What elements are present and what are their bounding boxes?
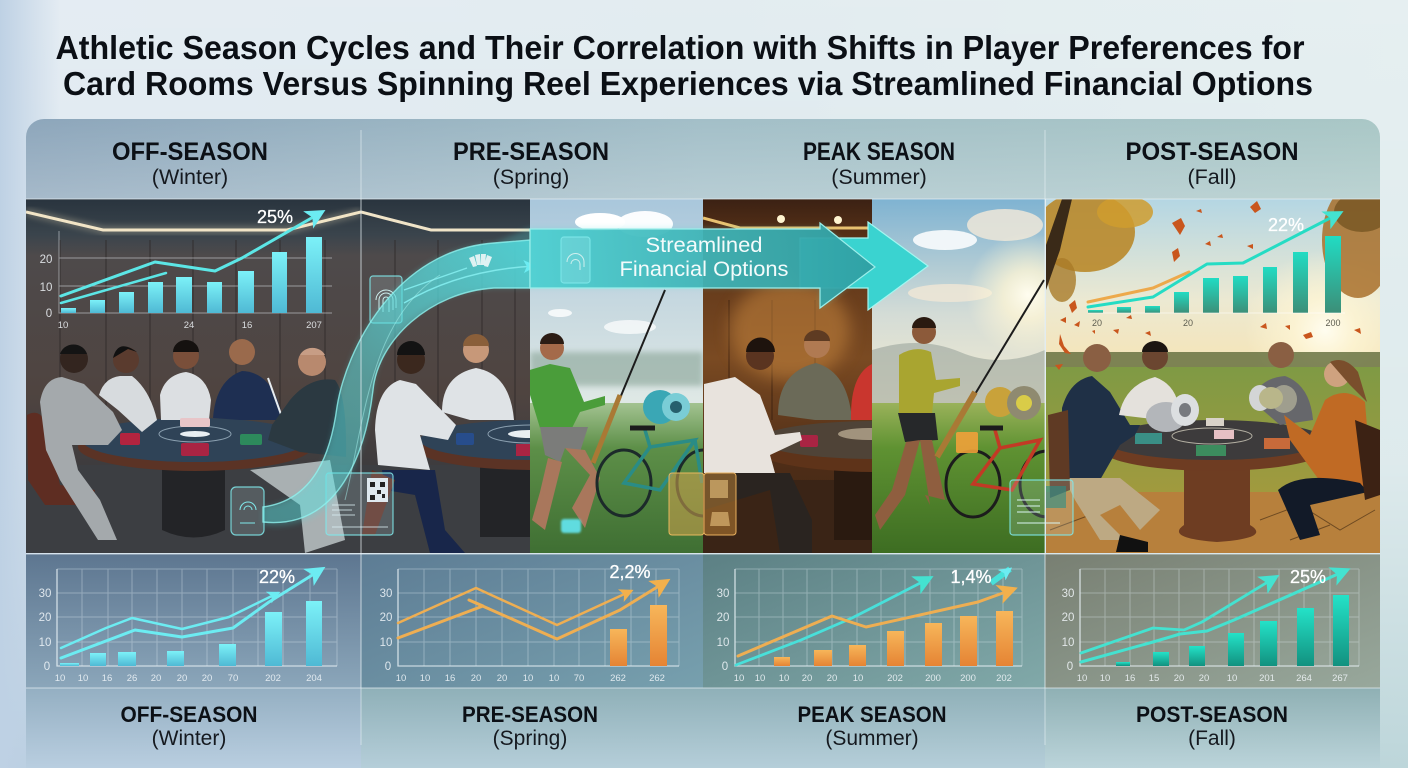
chart: off-season: 22%	[259, 567, 295, 587]
chart: post-season: 267	[1332, 673, 1348, 684]
chart: winter room bars: 10	[40, 282, 52, 294]
streamlined band	[530, 222, 928, 310]
chairs and table	[27, 413, 312, 538]
icon: red bicycle	[944, 426, 1045, 518]
label: pre-season: PRE-SEASON	[462, 702, 598, 727]
chart: pre-season: 20	[497, 673, 507, 684]
arrow: streamlined financial options swoosh	[263, 222, 928, 526]
label: off-season	[120, 702, 258, 750]
person: red top	[851, 364, 872, 420]
card table	[770, 421, 872, 540]
chart: peak season: 1,4%	[950, 567, 992, 587]
chart: pre-season: 262	[610, 673, 626, 684]
chart: pre-season: 10	[380, 637, 392, 649]
icon: orange card	[956, 432, 978, 453]
icon: fingerprint card on band	[561, 237, 590, 283]
chart: peak season: 20	[802, 673, 812, 684]
chart: post-season: 264	[1296, 673, 1312, 684]
chart: peak season: 10	[853, 673, 863, 684]
chart: post-season	[1045, 554, 1380, 688]
panel: footer season labels	[26, 688, 1380, 768]
chart: peak season: 10	[755, 673, 765, 684]
icon: teal ledger card	[1010, 480, 1073, 535]
heading: off-season: OFF-SEASON	[112, 138, 268, 166]
icon: QR card	[326, 473, 393, 535]
person: white tee	[1119, 341, 1180, 420]
person: green shirt runner	[523, 333, 605, 530]
label: off-season: OFF-SEASON	[120, 702, 258, 727]
heading: off-season: (Winter)	[152, 165, 228, 189]
card table	[421, 420, 530, 537]
heading: pre-season: PRE-SEASON	[453, 138, 609, 166]
financial glass cards	[231, 276, 1073, 535]
panel: season header band	[26, 119, 1380, 199]
chart: pre-season: 16	[445, 673, 455, 684]
poker chips	[120, 418, 262, 456]
person: white jacket	[99, 346, 157, 432]
chart: pre-season: 0	[385, 661, 391, 673]
chart: post-season: 10	[1077, 673, 1087, 684]
chart: post-season: 20	[1062, 612, 1074, 624]
chart: pre-season: 70	[574, 673, 584, 684]
icon: phone card	[231, 487, 264, 535]
foliage trees	[1046, 199, 1380, 302]
falling leaves	[1055, 201, 1361, 370]
chart: post-season: 20	[1174, 673, 1184, 684]
label: peak season: PEAK SEASON	[798, 702, 946, 727]
heading: post-season: POST-SEASON	[1126, 138, 1298, 166]
chart: winter room bars: 16	[242, 320, 252, 331]
label: peak season	[798, 702, 946, 750]
chart: peak season: 10	[734, 673, 744, 684]
chart: off-season: 10	[39, 637, 51, 649]
chart: post-season: 20	[1199, 673, 1209, 684]
chart: autumn rising bars: 20	[1183, 318, 1193, 328]
chart: winter room bars: 10	[58, 320, 68, 331]
heading: post-season	[1126, 138, 1298, 189]
person: white jacket centre	[160, 340, 211, 420]
heading: pre-season: (Spring)	[493, 165, 569, 189]
title: Card Rooms Versus Spinning Reel Experiences via Streamlined Financial Options	[63, 66, 1313, 103]
chart: pre-season: 10	[549, 673, 559, 684]
chart: off-season: 16	[102, 673, 112, 684]
title	[56, 30, 1313, 103]
chart: off-season: 26	[127, 673, 137, 684]
chart: peak season: 30	[717, 588, 729, 600]
chart: autumn rising bars: 22%	[1268, 215, 1304, 235]
heading: peak season: PEAK SEASON	[803, 138, 955, 166]
chart: winter room bars	[40, 207, 332, 331]
label: streamlined financial options: Financial Options	[620, 258, 788, 281]
label: peak season: (Summer)	[825, 727, 919, 750]
chart: off-season: 0	[44, 661, 50, 673]
panel: spring card room scene	[361, 199, 530, 553]
person: navy sweater	[1048, 344, 1160, 552]
chart: autumn rising bars: 200	[1325, 318, 1341, 328]
icon: teal bicycle	[596, 426, 703, 518]
person: white jacket right	[442, 334, 514, 420]
chart: peak season: 10	[717, 637, 729, 649]
panel: summer outdoor scene	[872, 199, 1045, 553]
panel dividers	[26, 199, 1380, 688]
chart: peak season: 20	[827, 673, 837, 684]
chart: post-season: 25%	[1290, 567, 1326, 587]
chart: off-season: 20	[177, 673, 187, 684]
chart: peak season: 202	[887, 673, 903, 684]
panel: autumn outdoor card scene	[1046, 199, 1380, 553]
heading: post-season: (Fall)	[1188, 165, 1236, 189]
chart: winter room bars: 207	[306, 320, 322, 331]
chart: peak season: 0	[722, 661, 728, 673]
person: yellow vest runner	[875, 317, 960, 530]
person: white jacket left	[362, 341, 465, 553]
chart: pre-season: 2,2%	[609, 562, 651, 582]
panel: summer card room scene	[703, 199, 872, 553]
chart: post-season: 30	[1062, 588, 1074, 600]
chart: off-season: 20	[39, 612, 51, 624]
icon: fishing rod and gold reel	[937, 280, 1044, 457]
label: pre-season: (Spring)	[493, 727, 567, 750]
chart: off-season: 20	[151, 673, 161, 684]
chart: winter room bars: 20	[40, 254, 52, 266]
chart: winter room bars: 24	[184, 320, 194, 331]
icon: spring gold card	[669, 473, 704, 535]
chart: pre-season: 20	[380, 612, 392, 624]
icon: fingerprint card	[370, 276, 402, 323]
label: post-season: (Fall)	[1188, 727, 1236, 750]
chart: off-season: 202	[265, 673, 281, 684]
icon: summer gold card	[704, 473, 736, 535]
icon: silver spinning reels	[1146, 385, 1297, 432]
chart: off-season: 204	[306, 673, 322, 684]
person: navy track jacket	[213, 339, 283, 420]
label: streamlined financial options	[620, 234, 788, 281]
chart: off-season	[26, 554, 361, 688]
chart: peak season: 202	[996, 673, 1012, 684]
chart: post-season: 201	[1259, 673, 1275, 684]
icon: fan of cards	[469, 254, 492, 267]
chart: off-season: 70	[228, 673, 238, 684]
heading: peak season: (Summer)	[831, 165, 927, 189]
chart: pre-season	[361, 554, 703, 688]
chart: peak season	[703, 554, 1045, 688]
chart: pre-season: 10	[396, 673, 406, 684]
person: grey hoodie	[40, 344, 122, 540]
chart: post-season: 10	[1100, 673, 1110, 684]
chart: off-season: 20	[202, 673, 212, 684]
panel: spring outdoor scene	[530, 199, 703, 553]
chart: post-season: 0	[1067, 661, 1073, 673]
label: pre-season	[462, 702, 598, 750]
chart: winter room bars: 25%	[257, 207, 293, 227]
label: streamlined financial options: Streamlined	[646, 234, 762, 257]
chart: autumn rising bars: 20	[1092, 318, 1102, 328]
label: post-season	[1136, 702, 1288, 750]
chart: off-season: 10	[78, 673, 88, 684]
panel: winter card room scene	[26, 199, 361, 553]
chart: pre-season: 20	[471, 673, 481, 684]
person: grey shirt	[1261, 342, 1313, 425]
chart: post-season: 15	[1149, 673, 1159, 684]
icon: fishing rod and reel	[593, 290, 690, 463]
person: olive sweater	[778, 330, 852, 420]
chart: pre-season: 10	[420, 673, 430, 684]
chart: off-season: 30	[39, 588, 51, 600]
chart: pre-season: 10	[523, 673, 533, 684]
card table	[1112, 418, 1312, 542]
chart: post-season: 16	[1125, 673, 1135, 684]
chart: pre-season: 262	[649, 673, 665, 684]
label: off-season: (Winter)	[152, 727, 226, 750]
chart: post-season: 10	[1227, 673, 1237, 684]
chart: post-season: 10	[1062, 637, 1074, 649]
heading: off-season	[112, 138, 268, 189]
chart: peak season: 20	[717, 612, 729, 624]
chart: off-season: 10	[55, 673, 65, 684]
label: post-season: POST-SEASON	[1136, 702, 1288, 727]
icon: glowing QR tile	[561, 519, 581, 533]
person: dark hoodie	[250, 348, 346, 553]
chart: peak season: 200	[960, 673, 976, 684]
heading: pre-season	[453, 138, 609, 189]
title: Athletic Season Cycles and Their Correlation with Shifts in Player Preferences for	[56, 30, 1304, 67]
chart: peak season: 10	[779, 673, 789, 684]
chart: pre-season: 30	[380, 588, 392, 600]
person: orange sweater woman	[1278, 360, 1380, 540]
chart: peak season: 200	[925, 673, 941, 684]
person: white tee	[704, 338, 812, 553]
chart: winter room bars: 0	[46, 308, 52, 320]
heading: peak season	[803, 138, 955, 189]
chart: autumn rising bars	[1088, 213, 1345, 328]
